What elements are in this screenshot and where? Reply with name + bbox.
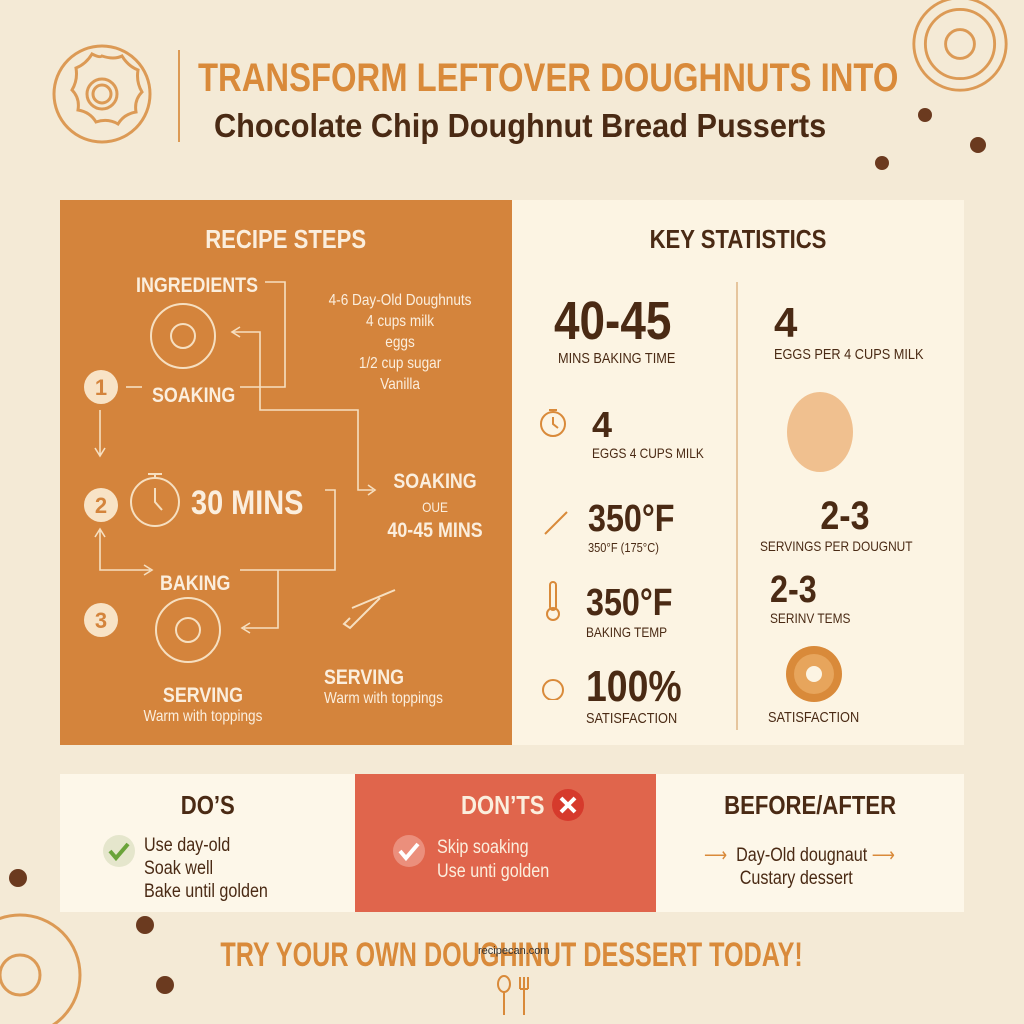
panel: do's: Use day-old [144,835,230,856]
soaking 40-45: SOAKING [393,470,477,493]
ingredients list [328,292,471,393]
panel: do's: DO’S [180,790,235,820]
stat: 4 eggs 4 cups: EGGS 4 CUPS MILK [592,445,704,461]
decorative donut top-right [912,0,1008,92]
serving left: Warm with toppings [143,708,262,725]
icon: donut [786,646,842,702]
soaking 40-45: 40-45 MINS [387,519,483,542]
stat: 2-3 servings: SERVINGS PER DOUGNUT [760,538,913,554]
label: soaking: SOAKING [152,384,235,407]
label: baking: BAKING [160,572,230,595]
stat: 4 eggs 4 cups: 4 [592,404,612,445]
label: satisfaction: SATISFACTION [768,709,859,726]
stat: 100%: 100% [586,662,682,711]
stat: 4 eggs right: 4 [774,299,797,346]
icon: egg [787,392,853,472]
stat: 2-3 serinv: SERINV TEMS [770,610,850,626]
stat: 4 eggs 4 cups [592,404,704,461]
ingredients list: 1/2 cup sugar [359,355,441,372]
call to action: TRY YOUR OWN DOUGHINUT DESSERT TODAY! [221,936,803,974]
stat: 40-45: 40-45 [554,291,671,351]
ingredients list: 4 cups milk [366,313,434,330]
stat: 4 eggs right: EGGS PER 4 CUPS MILK [774,346,924,363]
icon: spoon and fork [497,975,529,1015]
stat: 2-3 servings [760,494,913,554]
stat: 350F 175C: 350°F [588,498,675,540]
30 mins: 30 MINS [191,484,303,522]
soaking 40-45: OUE [422,499,448,515]
panel: recipe steps: 1 [95,375,107,400]
stat: 350F 175C: 350°F (175°C) [588,540,659,555]
serving right: Warm with toppings [324,690,443,707]
panel: don'ts: Use unti golden [437,861,549,882]
heading: key statistics: KEY STATISTICS [650,224,826,254]
serving right: SERVING [324,666,404,689]
panel: do's: Soak well [144,858,213,879]
panel: key statistics [512,200,964,745]
ingredients list: Vanilla [380,376,420,393]
panel: don'ts: Skip soaking [437,837,529,858]
stat: 4 eggs right [774,299,924,363]
title divider [178,50,180,142]
ingredients list: 4-6 Day-Old Doughnuts [329,292,471,309]
panel: don'ts: DON’TS [461,790,544,820]
stat: 350F baking temp: BAKING TEMP [586,624,667,640]
title: TRANSFORM LEFTOVER DOUGHNUTS INTO [198,56,898,100]
heading: recipe steps: RECIPE STEPS [206,224,366,254]
icon: check [393,835,425,867]
stat: 40-45: MINS BAKING TIME [558,350,675,367]
watermark: recipecan.com [478,945,550,957]
decorative donut top-left [52,44,152,144]
stat: 2-3 serinv [770,569,850,626]
label: ingredients: INGREDIENTS [136,274,258,297]
serving right [324,666,443,707]
panel: do's: Bake until golden [144,881,268,902]
stat: 350F baking temp: 350°F [586,582,673,624]
title [198,56,898,144]
panel: recipe steps [60,200,512,745]
stat: 2-3 servings: 2-3 [820,494,870,538]
ingredients list: eggs [385,334,415,351]
icon: check [103,835,135,867]
panel: before/after [656,774,964,912]
panel: recipe steps: 3 [95,608,107,633]
icons left column [540,409,568,700]
panel: don'ts [355,774,656,912]
stat: 2-3 serinv: 2-3 [770,569,817,611]
icon: x [552,789,584,821]
panel: before/after: Custary dessert [740,868,853,889]
panel: before/after: BEFORE/AFTER [724,790,896,820]
soaking 40-45 [387,470,483,542]
stat: 100%: SATISFACTION [586,710,677,727]
panel: recipe steps: 2 [95,493,107,518]
title: Chocolate Chip Doughnut Bread Pusserts [214,107,826,144]
panel: do's [60,774,355,912]
panel: before/after: ⟶ Day-Old dougnaut ⟶ [704,845,895,866]
serving left: SERVING [162,684,243,707]
serving left [143,684,262,725]
